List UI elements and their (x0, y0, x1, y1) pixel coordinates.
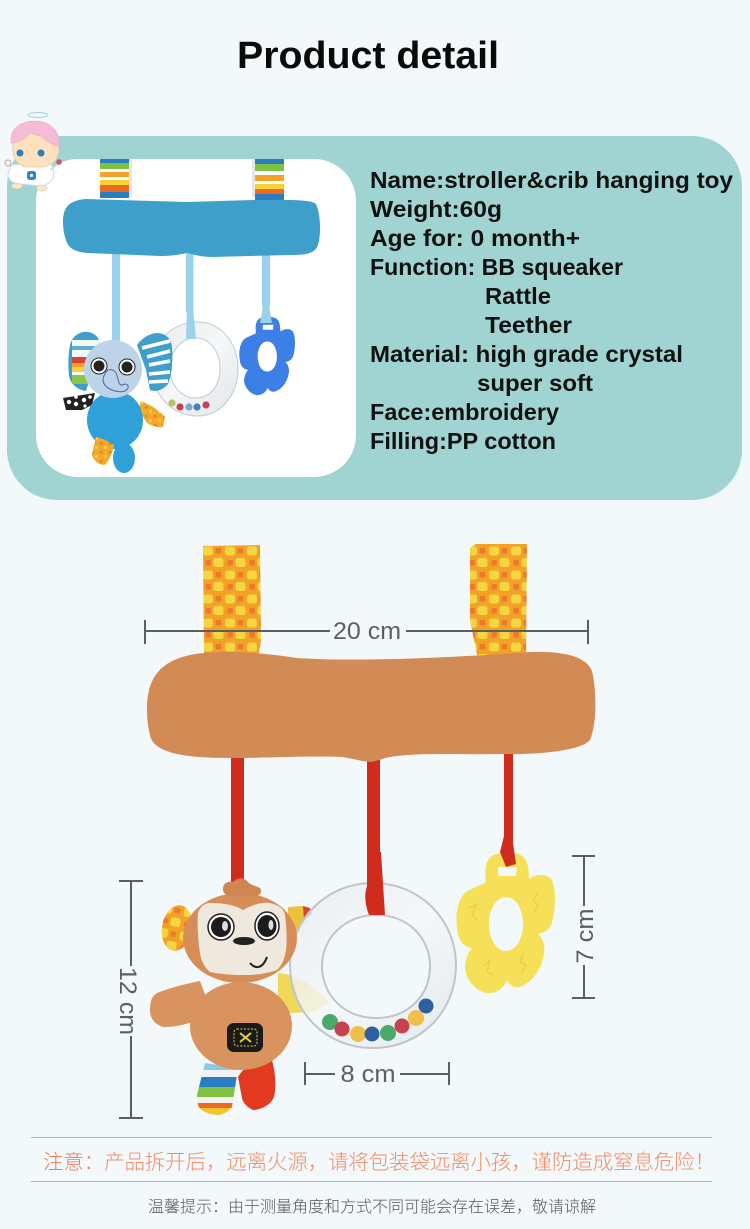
monkey toy (150, 878, 297, 1116)
body (190, 982, 292, 1070)
ribbons (231, 752, 513, 883)
dimension: 7 cm height: 7 cm (572, 908, 599, 964)
patterned hanging tabs (203, 544, 527, 660)
head (183, 893, 297, 983)
blue leg (113, 443, 135, 473)
panel: product photo card (36, 159, 356, 477)
left ear (68, 332, 100, 391)
specification text: Function: BB squeaker (370, 254, 623, 280)
specification text: Age for: 0 month+ (370, 225, 580, 251)
specification text: Teether (485, 312, 572, 338)
striped hanging tabs (100, 159, 284, 200)
toy photo: blue elephant hanging toy (63, 159, 320, 473)
black and white tag (63, 393, 95, 410)
clear rattle ring (290, 852, 456, 1048)
specification text (370, 167, 733, 454)
ribbons (112, 252, 270, 347)
specification text: Face:embroidery (370, 399, 559, 425)
dimension: 8 cm width: 8 cm (340, 1061, 396, 1088)
specification text: Weight:60g (370, 196, 502, 222)
body (87, 391, 143, 449)
specification text: super soft (477, 370, 593, 396)
yellow teether flower (456, 836, 555, 993)
dimension: 20 cm width (145, 618, 588, 645)
orange foot (92, 437, 114, 465)
title: Product detail (237, 35, 499, 77)
orange arm (140, 401, 165, 427)
striped leg (197, 1063, 238, 1115)
specification text: Material: high grade crystal (370, 341, 683, 367)
specification text: Name:stroller&crib hanging toy (370, 167, 733, 193)
toy photo: orange monkey hanging toy (147, 544, 595, 1116)
plush bar (63, 199, 320, 257)
head (84, 340, 142, 398)
red leg (238, 1060, 275, 1110)
right ear (137, 333, 172, 391)
panel: product specification (7, 136, 742, 500)
elephant toy (63, 330, 175, 473)
measurement disclaimer: 温馨提示：由于测量角度和方式不同可能会存在误差，敬请谅解 (148, 1198, 596, 1216)
dimension: 8 cm width (305, 1061, 449, 1088)
ear (158, 903, 196, 953)
specification text: Filling:PP cotton (370, 428, 556, 454)
face (198, 903, 287, 975)
blue teether flower (239, 306, 295, 395)
dimension: 20 cm width: 20 cm (333, 618, 401, 645)
warning notice: 注意：产品拆开后，远离火源，请将包装袋远离小孩，谨防造成窒息危险！ (43, 1151, 715, 1174)
plush bar (147, 652, 595, 762)
dimension: 7 cm height (572, 856, 599, 998)
specification text: Rattle (485, 283, 551, 309)
patch (227, 1023, 263, 1052)
monkey toy back parts (278, 906, 330, 1014)
dimension: 12 cm height (114, 881, 143, 1118)
icon: angel mascot (5, 112, 62, 191)
clear rattle ring (152, 308, 238, 416)
arm (150, 981, 207, 1027)
dimension: 12 cm height: 12 cm (114, 967, 141, 1035)
tuft (223, 878, 261, 896)
